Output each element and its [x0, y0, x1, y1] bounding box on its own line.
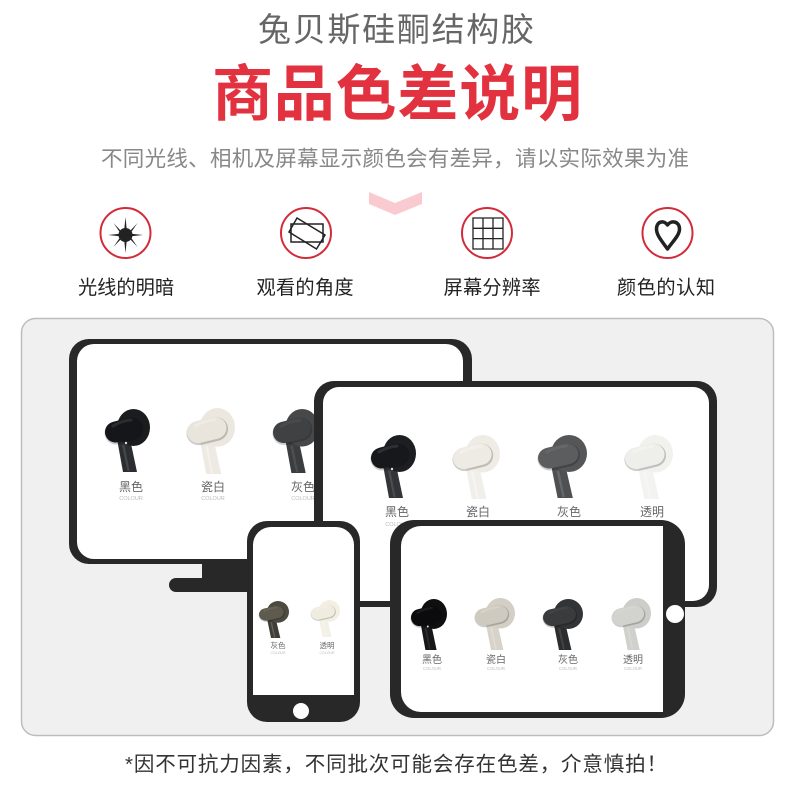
labels: 透明: [640, 505, 664, 519]
subtitle: 兔贝斯硅酮结构胶: [258, 11, 534, 48]
labels: [385, 504, 664, 528]
labels: 透明: [623, 654, 643, 666]
device: large tablet: [314, 381, 717, 607]
labels: [119, 479, 315, 502]
labels: 透明: [320, 641, 334, 650]
main title: 商品色差说明: [212, 60, 582, 128]
labels: 灰色: [557, 505, 581, 519]
labels: 黑色: [422, 653, 442, 666]
factor: perception: [617, 208, 715, 299]
product: porcelain: [196, 408, 235, 474]
labels: COLOUR: [487, 666, 505, 671]
labels: COLOUR: [385, 522, 409, 528]
factor: resolution: [444, 208, 540, 299]
description: 不同光线、相机及屏幕显示颜色会有差异，请以实际效果为准: [101, 147, 689, 171]
phone button: [293, 703, 309, 719]
labels: 灰色: [270, 640, 286, 650]
chevron: [369, 192, 422, 215]
labels: 瓷白: [466, 504, 490, 519]
labels: 灰色: [558, 653, 578, 666]
label: 观看的角度: [256, 277, 354, 299]
labels: [422, 653, 643, 671]
icon: grid: [462, 208, 512, 258]
labels: COLOUR: [559, 666, 577, 671]
factor: light: [78, 208, 174, 299]
labels: 黑色: [119, 480, 143, 494]
device: phone: [247, 521, 360, 722]
labels: 瓷白: [201, 479, 225, 494]
footnote: *因不可抗力因素，不同批次可能会存在色差，介意慎拍！: [125, 753, 667, 776]
labels: COLOUR: [423, 666, 441, 671]
device: monitor: [69, 339, 472, 592]
tablet button: [666, 605, 684, 623]
product: black: [417, 599, 447, 650]
product: gray: [264, 601, 289, 638]
labels: COLOUR: [201, 496, 225, 502]
icon: rotated rectangles: [281, 208, 331, 258]
labels: 瓷白: [486, 653, 506, 666]
device: small tablet: [390, 520, 685, 718]
product: gray: [281, 409, 319, 473]
product: black: [379, 435, 416, 498]
product: gray: [550, 599, 583, 650]
labels: [270, 640, 335, 655]
icon: sun: [100, 208, 150, 258]
product: clear: [634, 435, 673, 499]
labels: 灰色: [291, 480, 315, 494]
product: clear: [619, 598, 651, 650]
labels: COLOUR: [291, 496, 315, 502]
product: gray: [547, 435, 587, 498]
labels: COLOUR: [119, 496, 143, 502]
product: porcelain: [482, 598, 515, 650]
product: black: [113, 409, 150, 472]
labels: 黑色: [385, 505, 409, 519]
product: porcelain: [461, 435, 500, 499]
label: 颜色的认知: [617, 277, 715, 299]
labels: COLOUR: [320, 651, 335, 655]
icon: heart: [642, 208, 692, 258]
factor: angle: [256, 208, 354, 299]
labels: COLOUR: [271, 651, 286, 655]
label: 屏幕分辨率: [444, 277, 540, 299]
label: 光线的明暗: [78, 277, 174, 299]
labels: COLOUR: [624, 666, 642, 671]
product: clear: [316, 600, 340, 637]
panel: devices: [22, 318, 774, 736]
